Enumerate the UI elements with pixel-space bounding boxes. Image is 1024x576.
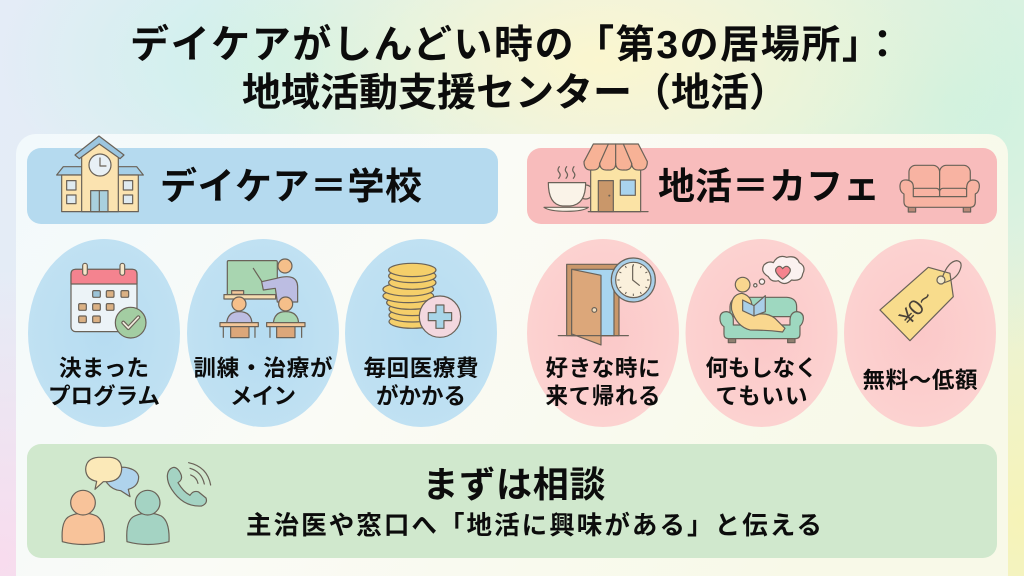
panel: come and go anytime: [527, 239, 679, 427]
title: [130, 23, 902, 115]
heading: day care equals school: デイケア＝学校: [160, 165, 422, 207]
icon: school building: [57, 136, 143, 212]
label: nothing required: てもいい: [716, 384, 808, 409]
icon: sofa: [900, 165, 979, 212]
icon: teacher and students: [220, 259, 305, 338]
panel: community activity center header: [527, 148, 997, 224]
label: training and treatment: 訓練・治療が: [194, 355, 333, 381]
label: medical fee every visit: 毎回医療費: [364, 356, 478, 381]
panel: nothing required: [686, 239, 838, 427]
title: 地域活動支援センター（地活）: [242, 72, 788, 115]
title: デイケアがしんどい時の「第3の居場所」：: [130, 23, 902, 67]
panel: training and treatment: [187, 239, 339, 427]
icon: coffee cup and cafe: [544, 144, 648, 212]
icon: open door and clock: [558, 258, 655, 345]
icon: calendar with check: [71, 263, 146, 338]
label: nothing required: 何もしなく: [706, 356, 818, 381]
text: tell your doctor: 主治医や窓口へ「地活に興味がある」と伝える: [246, 511, 822, 540]
heading: consult first: まずは相談: [422, 464, 606, 505]
heading: community center equals cafe: 地活＝カフェ: [658, 166, 880, 207]
panel: day care header: [27, 148, 498, 224]
icon: coin stack with plus: [383, 263, 461, 337]
panel: free to low cost: [844, 239, 996, 427]
panel: white background card: [16, 134, 1008, 576]
label: come and go anytime: 好きな時に: [546, 356, 660, 381]
label: fixed program: プログラム: [48, 383, 160, 409]
label: fixed program: 決まった: [59, 356, 149, 381]
icon: person reading on sofa: [720, 256, 804, 343]
panel: medical fee every visit: [345, 239, 497, 427]
panel: fixed program: [28, 239, 180, 427]
icon: price tag: [880, 261, 961, 341]
label: come and go anytime: 来て帰れる: [546, 384, 660, 409]
icon: price tag: ¥0~: [894, 285, 938, 330]
label: free to low cost: 無料～低額: [862, 368, 978, 393]
label: training and treatment: メイン: [230, 384, 296, 409]
icon: two people talking and phone: [62, 457, 211, 544]
label: medical fee every visit: がかかる: [376, 383, 466, 409]
panel: consult first: [27, 444, 997, 558]
